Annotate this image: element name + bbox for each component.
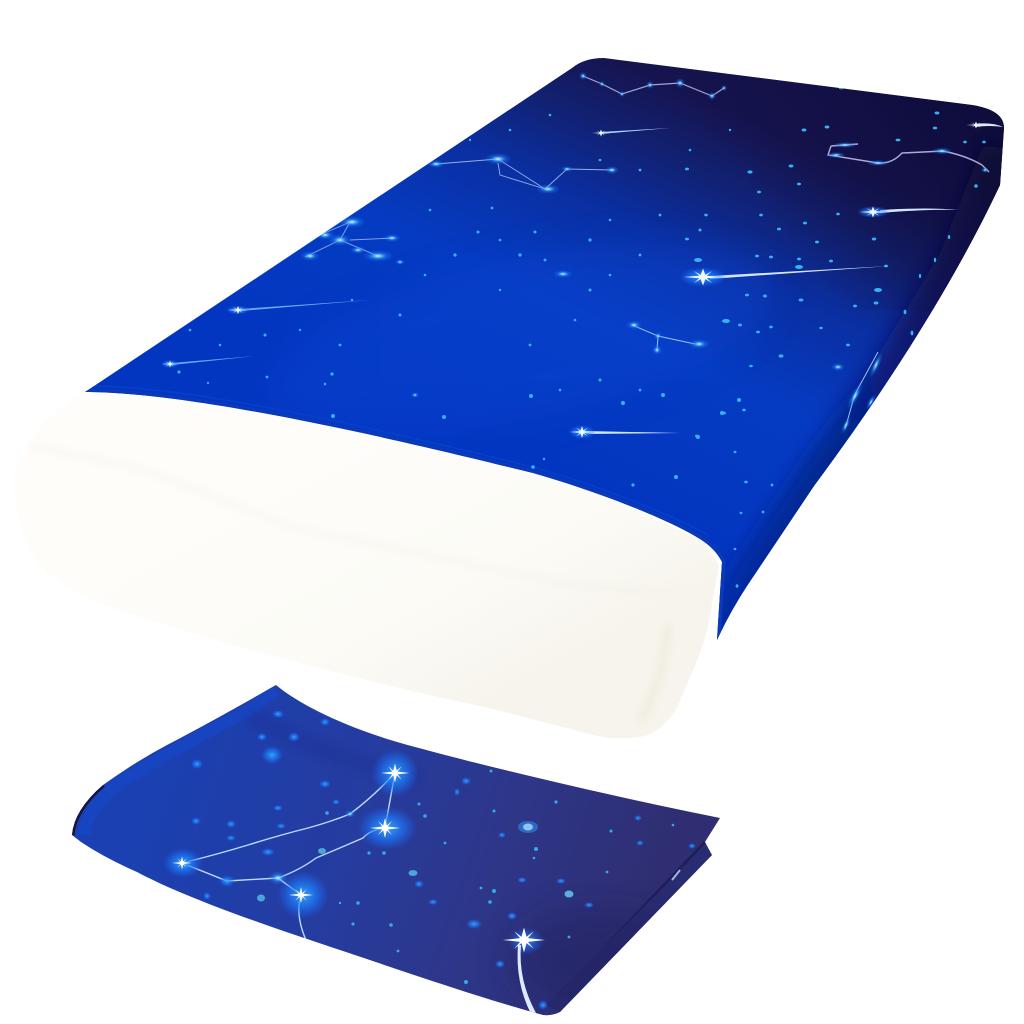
top highlight fold (252, 712, 266, 725)
shooting star: lower left (161, 356, 255, 368)
small glowing stars (395, 259, 845, 398)
constellation: side drop (842, 352, 882, 434)
constellation: big dipper left (427, 153, 619, 194)
bright glowing stars (163, 749, 545, 1014)
shooting star: top (592, 128, 670, 136)
shooting star: left (226, 300, 370, 314)
mattress foam base (14, 392, 719, 738)
dark right edge shading (715, 150, 1006, 645)
shooting star: near hem (568, 425, 680, 439)
shooting star: right (857, 206, 958, 218)
shooting star: far right corner (966, 122, 1003, 128)
constellation: left cluster (300, 216, 401, 262)
scattered small stars (177, 87, 986, 588)
constellation: right top (826, 142, 989, 173)
foam corner shade (640, 625, 668, 722)
pillowcase body (72, 685, 720, 1015)
shooting star: large center (679, 266, 890, 287)
foam body (14, 392, 719, 738)
scattered stars (191, 710, 696, 1010)
sheet hem line (85, 392, 722, 640)
folded pillowcase (72, 685, 720, 1015)
pillowcase opening band (84, 690, 276, 835)
lower right shade (513, 913, 652, 1000)
foam edge crease (29, 445, 679, 592)
right fold layers (606, 841, 706, 944)
constellation lines (182, 773, 395, 940)
top-right darkening (708, 71, 1004, 310)
constellation: top edge (579, 72, 727, 100)
constellation: center small (626, 320, 710, 355)
lighter central glow (560, 246, 767, 340)
fitted sheet (85, 50, 1020, 645)
sheet surface (85, 58, 1004, 640)
